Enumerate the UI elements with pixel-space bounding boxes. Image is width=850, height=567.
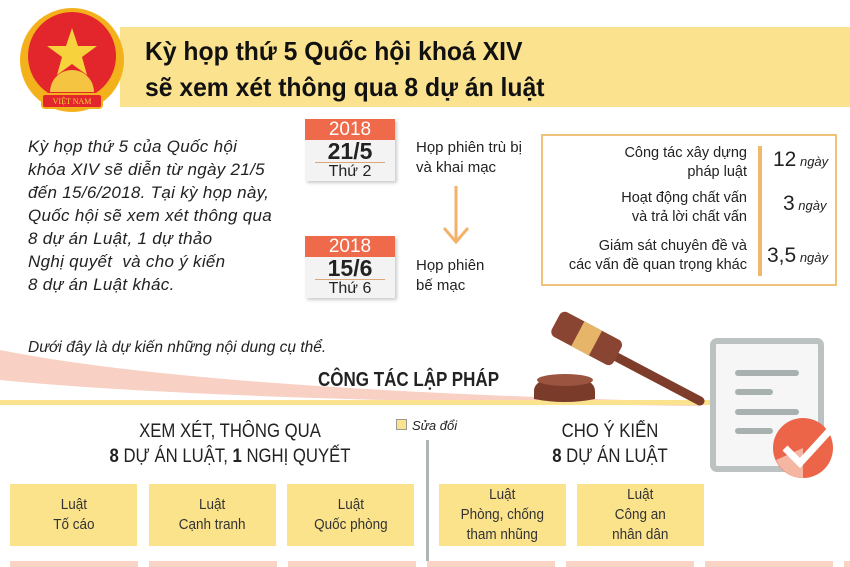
law box: Canh tranh [149,484,276,546]
divider [426,440,429,567]
calendar 1: 21/5 [328,138,372,164]
law box: Quoc phong: Luật [337,496,364,513]
law box: Cong an nhan dan: nhân dân [612,526,669,543]
calendar 2: 2018 [329,236,371,257]
law box: Phong chong tham nhung: tham nhũng [467,526,538,543]
legend: Sửa đổi [412,418,457,433]
calendar 2: Thứ 6 [329,280,371,297]
right heading [552,420,668,467]
schedule box [541,134,837,286]
law box: To cao: Tố cáo [53,516,94,533]
emblem [20,8,124,112]
title band [120,27,850,107]
emblem: VIỆT NAM [53,96,91,106]
law box: To cao [10,484,137,546]
right heading: CHO Ý KIẾN [562,421,658,442]
label 2 [416,257,484,294]
law box: Cong an nhan dan [577,484,704,546]
law box: Canh tranh: Cạnh tranh [179,516,246,533]
law box: Canh tranh: Luật [199,496,226,513]
left heading [109,420,351,467]
title: sẽ xem xét thông qua 8 dự án luật [145,72,544,102]
intro text: Quốc hội sẽ xem xét thông qua [28,206,272,225]
icon: gavel [534,312,704,406]
next row boxes [10,561,850,567]
calendar 2: 15/6 [328,255,372,281]
intro text: 8 dự án Luật khác. [28,275,175,294]
law box: To cao: Luật [60,496,87,513]
intro text [28,137,272,294]
label 1 [416,139,522,176]
calendar 1: Thứ 2 [329,163,371,180]
schedule box: 3 ngày [783,192,826,215]
schedule box: pháp luật [687,164,747,180]
intro text: Nghị quyết và cho ý kiến [28,252,225,271]
schedule box: các vấn đề quan trọng khác [569,257,747,273]
intro text: đến 15/6/2018. Tại kỳ họp này, [28,183,269,202]
schedule box: 12 ngày [773,148,828,171]
decorative sweep [0,350,710,406]
schedule box: và trả lời chất vấn [632,209,747,225]
schedule box: Hoạt động chất vấn [621,190,747,206]
label 2: Họp phiên [416,257,484,274]
intro text: 8 dự án Luật, 1 dự thảo [28,229,212,248]
schedule box: Công tác xây dựng [624,145,747,161]
section heading: CÔNG TÁC LẬP PHÁP [318,369,499,391]
law box: Phong chong tham nhung: Phòng, chống [461,506,544,523]
right heading: 8 DỰ ÁN LUẬT [552,446,668,467]
title: Kỳ họp thứ 5 Quốc hội khoá XIV [145,36,522,66]
law box: Cong an nhan dan: Luật [627,486,654,503]
law box: Phong chong tham nhung [439,484,566,546]
left heading: 8 DỰ ÁN LUẬT, 1 NGHỊ QUYẾT [109,446,351,467]
calendar 1: 2018 [329,119,371,140]
label 2: bế mạc [416,277,465,294]
title [145,36,544,102]
intro text: khóa XIV sẽ diễn từ ngày 21/5 [28,160,265,179]
law box: Quoc phong: Quốc phòng [314,516,387,533]
calendar 1 [305,119,395,181]
icon: document with check [710,338,833,478]
calendar 2 [305,236,395,298]
law box: Phong chong tham nhung: Luật [489,486,516,503]
arrow [443,186,469,244]
law box: Cong an nhan dan: Công an [615,506,666,523]
label 1: Họp phiên trù bị [416,139,522,156]
schedule box: Giám sát chuyên đề và [599,238,747,254]
schedule box: 3,5 ngày [767,244,828,267]
left heading: XEM XÉT, THÔNG QUA [139,421,321,442]
law box: Quoc phong [287,484,414,546]
label 1: và khai mạc [416,159,496,176]
intro text: Kỳ họp thứ 5 của Quốc hội [28,137,237,156]
subtitle: Dưới đây là dự kiến những nội dung cụ thể. [28,339,326,356]
